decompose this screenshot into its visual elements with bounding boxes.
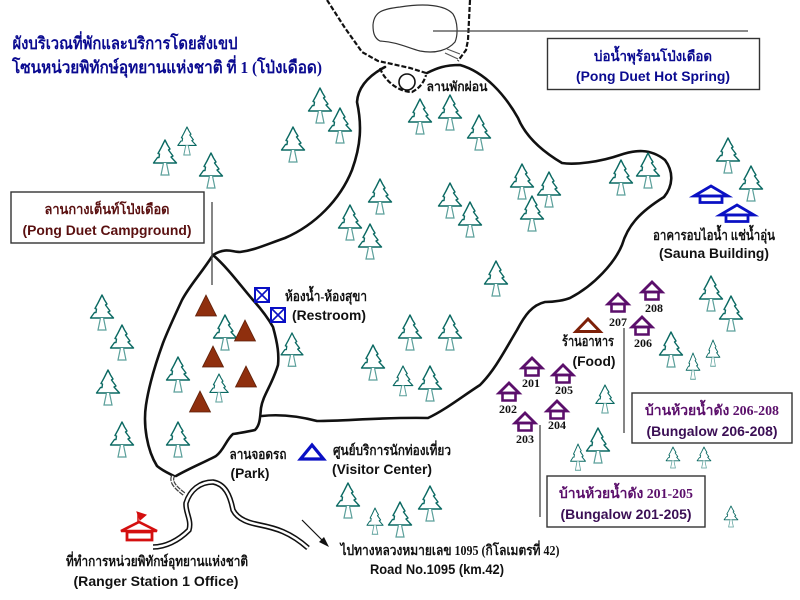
label: restroom: ห้องน้ำ-ห้องสุขา — [285, 285, 367, 305]
bungalows 206-208: 207 — [609, 315, 627, 329]
label: restroom: (Restroom) — [292, 308, 366, 323]
bungalows 201-205: 202 — [499, 402, 517, 416]
icon: restrooms — [255, 288, 285, 322]
callout: bungalow 206-208 — [632, 393, 792, 443]
label: park: ลานจอดรถ — [230, 448, 286, 463]
road: campground right side — [176, 255, 278, 476]
road: east loop — [262, 65, 671, 421]
callout: campground: ลานกางเต็นท์โป่งเดือด — [44, 200, 170, 218]
icon: sauna buildings — [694, 186, 754, 222]
label: food — [562, 334, 616, 369]
title: โซนหน่วยพิทักษ์อุทยานแห่งชาติ ที่ 1 (โป่งเดือด) — [11, 55, 322, 78]
bungalows 201-205 — [499, 358, 573, 446]
callout: bungalow 206-208: (Bungalow 206-208) — [646, 424, 778, 439]
lake: hot spring — [373, 5, 457, 52]
bungalows 201-205: 205 — [555, 383, 573, 397]
label: park: (Park) — [230, 466, 270, 481]
callout: hot spring — [548, 38, 760, 90]
callout: bungalow 206-208: บ้านห้วยน้ำดัง 206-208 — [645, 399, 779, 419]
callout: bungalow 201-205: บ้านห้วยน้ำดัง 201-205 — [559, 482, 693, 502]
label: road 1095: Road No.1095 (km.42) — [370, 562, 504, 577]
label: visitor center — [332, 440, 451, 477]
icon: food — [576, 319, 600, 332]
label: ranger station: (Ranger Station 1 Office) — [74, 574, 238, 589]
label: restroom — [285, 285, 367, 323]
label: visitor center: (Visitor Center) — [332, 462, 432, 477]
label: road 1095: ไปทางหลวงหมายเลข 1095 (กิโลเมตรที่ 42) — [339, 540, 560, 559]
bungalows 201-205: 203 — [516, 432, 534, 446]
icon: visitor center — [300, 445, 324, 459]
arrow: to road 1095 — [302, 520, 329, 547]
road to ranger station — [153, 476, 308, 548]
label: visitor center: ศูนย์บริการนักท่องเที่ยว — [333, 440, 451, 459]
road: main loop — [145, 67, 385, 476]
label: ranger station — [66, 551, 248, 589]
callout: campground — [11, 192, 204, 243]
callout: hot spring: (Pong Duet Hot Spring) — [576, 69, 730, 84]
leader: bungalow 206-208 — [623, 328, 625, 433]
label: sauna — [653, 224, 775, 261]
title: ผังบริเวณที่พักและบริการโดยสังเขป — [12, 31, 238, 53]
bungalows 206-208: 208 — [645, 301, 663, 315]
callout: bungalow 201-205 — [547, 476, 705, 527]
label: food: ร้านอาหาร — [562, 334, 614, 350]
leader: bungalow 201-205 — [539, 425, 541, 517]
label: sauna: (Sauna Building) — [659, 246, 769, 261]
callout: hot spring: บ่อน้ำพุร้อนโป่งเดือด — [594, 45, 712, 65]
tents: campground — [190, 295, 256, 412]
icon: ranger station — [121, 512, 157, 540]
title — [11, 31, 322, 78]
label: road 1095 — [339, 540, 560, 577]
trail: dashed paths to the spring — [327, 0, 470, 92]
bungalows 206-208: 206 — [634, 336, 652, 350]
label: rest area: ลานพักผ่อน — [426, 79, 488, 94]
leader: campground — [211, 202, 213, 285]
bungalows 201-205: 201 — [522, 376, 540, 390]
connector between lake and road — [445, 49, 460, 59]
trees — [90, 88, 762, 537]
bungalows 206-208 — [608, 282, 663, 350]
bungalows 201-205: 204 — [548, 418, 566, 432]
label: ranger station: ที่ทำการหน่วยพิทักษ์อุทยานแห่งชาติ — [66, 551, 248, 570]
label: food: (Food) — [572, 354, 616, 369]
label: park — [230, 448, 286, 481]
leader: hot spring — [433, 30, 748, 32]
callout: campground: (Pong Duet Campground) — [22, 223, 192, 238]
callout: bungalow 201-205: (Bungalow 201-205) — [560, 507, 692, 522]
label: sauna: อาคารอบไอน้ำ แช่น้ำอุ่น — [653, 224, 775, 244]
